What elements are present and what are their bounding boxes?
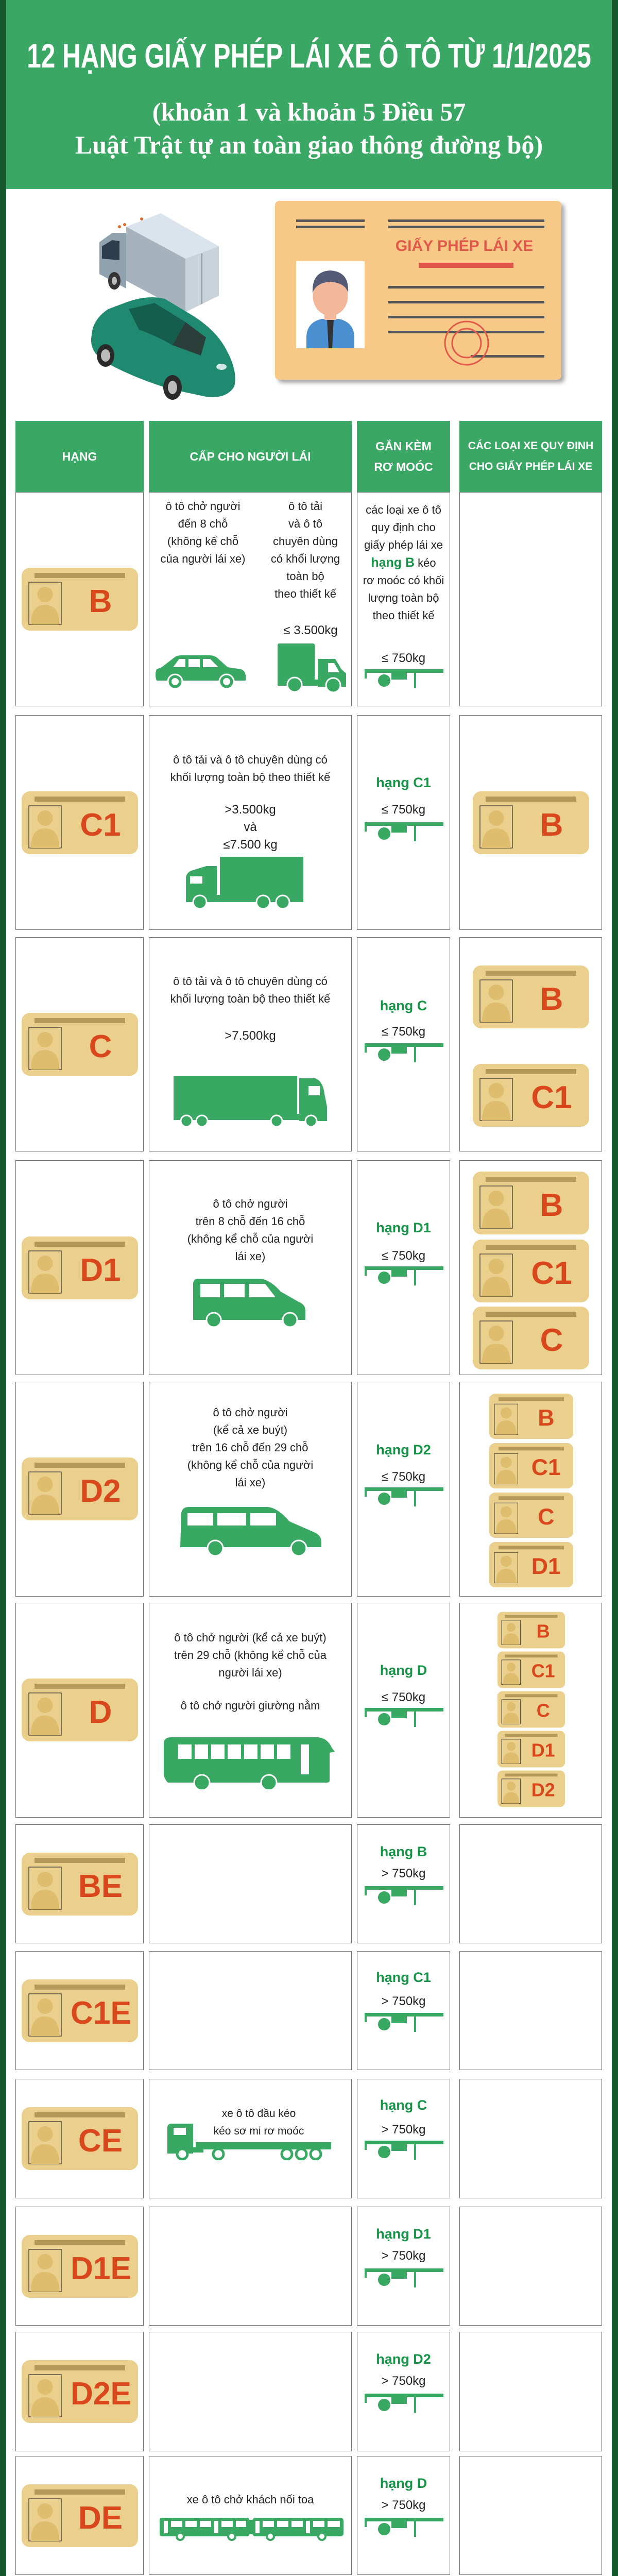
included licences B, C1, C, D1, D2: C1 (531, 1660, 555, 1681)
included licence B: B (540, 807, 563, 843)
text: hạng C1: hạng C1 (376, 775, 431, 790)
licence badge D1E: D1E (71, 2251, 131, 2286)
licence badge C1 (22, 791, 138, 854)
header: HẠNG: HẠNG (62, 450, 97, 463)
icon: trailer (365, 822, 443, 841)
row: hạng DE (0, 2456, 618, 2575)
text: trailer rule B (363, 503, 444, 622)
icon: box truck (278, 643, 346, 691)
photo (296, 261, 365, 348)
text: trailer rule B: lượng toàn bộ (368, 591, 439, 604)
text: C1 weights (223, 803, 278, 852)
text: hạng D1: hạng D1 (376, 2226, 431, 2242)
licence badge C (22, 1013, 138, 1076)
text: C weight: >7.500kg (225, 1029, 276, 1043)
licence badge D: D (89, 1694, 112, 1730)
icon: trailer (365, 1706, 443, 1727)
included licences B, C1, C, D1, D2 (497, 1612, 565, 1807)
text: trailer rule B: quy định cho (371, 521, 436, 534)
text: hạng D: hạng D (380, 2476, 427, 2491)
icon: heavy truck (174, 1076, 327, 1126)
illustration: driving licence card (275, 201, 561, 380)
text: ≤ 750kg: ≤ 750kg (382, 1025, 425, 1039)
text: hạng D2: hạng D2 (376, 1442, 431, 1458)
row: hạng D2E (0, 2332, 618, 2451)
subtitle: Luật Trật tự an toàn giao thông đường bộ) (75, 130, 543, 159)
licence badge C1: C1 (80, 807, 121, 843)
text: sleeper bus: ô tô chở người giường nằm (181, 1699, 320, 1712)
icon: trailer (365, 1487, 443, 1506)
text: hạng D2: hạng D2 (376, 2351, 431, 2367)
text: C1 weights: và (244, 820, 257, 834)
included licences B, C1, C, D1, D2: C (537, 1700, 550, 1721)
licence badge D2: D2 (80, 1473, 121, 1509)
text: passenger car (161, 500, 245, 565)
text: articulated bus: xe ô tô chở khách nối toa (187, 2493, 314, 2506)
text: trailer rule B: theo thiết kế (373, 609, 434, 622)
text: tractor description: xe ô tô đầu kéo (222, 2108, 296, 2120)
header: CẤP CHO NGƯỜI LÁI: CẤP CHO NGƯỜI LÁI (190, 450, 311, 463)
header: GẮN KÈM RƠ MOÓC (357, 421, 450, 492)
text: C description: khối lượng toàn bộ theo thiết kế (170, 992, 330, 1005)
text: light truck (271, 500, 340, 600)
text: light truck: theo thiết kế (274, 587, 336, 600)
licence badge B (22, 568, 138, 631)
illustration: truck and car (91, 213, 235, 400)
licence badge BE (22, 1853, 138, 1916)
row: hạng D1E (0, 2207, 618, 2326)
text: > 750kg: > 750kg (381, 2123, 426, 2137)
row: hạng BE (0, 1824, 618, 1943)
row: hạng C (15, 937, 602, 1151)
included licences B, C1, C, D1 (489, 1394, 573, 1587)
icon: trailer (365, 1884, 443, 1906)
text: D description (149, 1629, 352, 1682)
text: D description: ô tô chở người (kể cả xe buýt) (174, 1631, 327, 1644)
text: D2 description: trên 16 chỗ đến 29 chỗ (192, 1441, 308, 1454)
text: tractor description: kéo sơ mi rơ moóc (214, 2125, 304, 2137)
header: CÁC LOẠI XE (459, 421, 602, 492)
card title: GIẤY PHÉP LÁI XE (396, 238, 533, 255)
icon: trailer (365, 2139, 443, 2160)
icon: large van (180, 1507, 321, 1555)
text: D2 description: ô tô chở người (213, 1406, 288, 1419)
icon: trailer (365, 2011, 443, 2032)
licence badge C1E: C1E (71, 1995, 131, 2031)
icon: trailer (365, 2392, 443, 2413)
text: hạng C: hạng C (380, 998, 427, 1013)
included licences B, C1 (473, 965, 589, 1127)
text: passenger car: ô tô chở người (165, 500, 241, 513)
icon: trailer (365, 1043, 443, 1062)
text: hạng C1: hạng C1 (376, 1970, 431, 1985)
text: D2 description: lái xe) (235, 1476, 265, 1489)
text: light truck: và ô tô (288, 517, 322, 530)
text: C1 weights: >3.500kg (225, 803, 276, 817)
header: GẮN KÈM RƠ MOÓC: GẮN KÈM (375, 439, 432, 453)
text: D1 description: trên 8 chỗ đến 16 chỗ (196, 1215, 305, 1228)
header: CÁC LOẠI XE: CÁC LOẠI XE QUY ĐỊNH (468, 440, 593, 452)
text: D1 description: lái xe) (235, 1250, 265, 1263)
row: hạng D2 (15, 1382, 602, 1597)
subtitle (75, 97, 543, 159)
text: C1 description (170, 753, 330, 784)
text: ≤ 750kg: ≤ 750kg (382, 1249, 425, 1263)
included licences B, C1: C1 (531, 1080, 572, 1115)
text: trailer rule B: các loại xe ô tô (366, 503, 441, 516)
row: hạng C1 (15, 715, 602, 930)
icon: rigid truck (186, 857, 303, 908)
title: 12 HẠNG GIẤY PHÉP LÁI XE Ô TÔ TỪ 1/1/2025 (27, 37, 591, 75)
text: D2 description: (không kể chỗ của người (187, 1459, 313, 1471)
text: > 750kg: > 750kg (381, 1994, 426, 2008)
subtitle: (khoản 1 và khoản 5 Điều 57 (152, 97, 466, 126)
icon: car (156, 655, 246, 688)
text: C1 description: ô tô tải và ô tô chuyên dùng có (173, 753, 328, 766)
text: passenger car: (không kể chỗ (167, 535, 238, 548)
included licence B (473, 791, 589, 854)
icon: trailer (365, 669, 443, 688)
licence badge D2E (22, 2360, 138, 2423)
text: ≤ 750kg: ≤ 750kg (382, 651, 425, 665)
text: C1 description: khối lượng toàn bộ theo thiết kế (170, 771, 330, 784)
text: light truck: có khối lượng (271, 552, 340, 565)
icon: trailer (365, 1266, 443, 1285)
row: hạng CE (0, 2079, 618, 2198)
text: hạng B: hạng B (380, 1844, 427, 1859)
licence badge D1 (22, 1236, 138, 1299)
included licences B, C1, C: C (540, 1323, 563, 1358)
licence badge BE: BE (78, 1869, 123, 1904)
included licences B, C1, C, D1, D2: D1 (531, 1739, 555, 1760)
text: > 750kg: > 750kg (381, 2498, 426, 2512)
text: D1 description: ô tô chở người (213, 1197, 288, 1210)
included licences B, C1, C (473, 1172, 589, 1369)
header: GẮN KÈM RƠ MOÓC: RƠ MOÓC (374, 460, 433, 473)
icon: bus (164, 1737, 335, 1789)
text: hạng D1: hạng D1 (376, 1220, 431, 1235)
text: > 750kg: > 750kg (381, 1867, 426, 1880)
text: ≤ 750kg: ≤ 750kg (382, 803, 425, 817)
text: light truck: chuyên dùng (273, 535, 338, 548)
text: weight: ≤ 3.500kg (283, 623, 338, 637)
icon: trailer (365, 2266, 443, 2288)
header: HẠNG (15, 421, 144, 492)
licence badge D (22, 1679, 138, 1741)
text: > 750kg: > 750kg (381, 2249, 426, 2263)
included licences B, C1, C, D1: D1 (531, 1554, 561, 1579)
text: C description: ô tô tải và ô tô chuyên dùng có (173, 975, 328, 988)
icon: trailer (365, 2516, 443, 2537)
text: light truck: toàn bộ (286, 570, 324, 583)
icon: tractor with semi-trailer (167, 2122, 331, 2160)
text: D description: trên 29 chỗ (không kể chỗ của (174, 1649, 327, 1662)
icon: articulated bus (160, 2517, 344, 2541)
included licences B, C1, C, D1, D2: B (537, 1620, 550, 1641)
licence badge CE: CE (78, 2123, 123, 2159)
text: C description (170, 975, 330, 1005)
licence badge D1E (22, 2235, 138, 2298)
licence badge D1: D1 (80, 1252, 121, 1288)
text: passenger car: đến 8 chỗ (178, 517, 228, 530)
table header (15, 421, 602, 492)
header: CÁC LOẠI XE: CHO GIẤY PHÉP LÁI XE (469, 461, 592, 472)
licence badge CE (22, 2107, 138, 2170)
included licences B, C1, C, D1: C1 (531, 1455, 561, 1480)
text: D2 description (187, 1406, 313, 1489)
text: ≤ 750kg: ≤ 750kg (382, 1470, 425, 1484)
licence badge DE: DE (78, 2500, 123, 2536)
stamp (444, 320, 489, 366)
licence badge D2 (22, 1458, 138, 1520)
text: trailer rule B: hạng B kéo (371, 555, 436, 570)
text: > 750kg: > 750kg (381, 2374, 426, 2388)
included licences B, C1, C: C1 (531, 1256, 572, 1291)
row: hạng C1E (0, 1951, 618, 2070)
text: D description: người lái xe) (218, 1666, 282, 1679)
licence badge B: B (89, 584, 112, 619)
text: D2 description: (kể cả xe buýt) (213, 1423, 287, 1436)
header: CẤP CHO NGƯỜI LÁI (149, 421, 352, 492)
licence badge D2E: D2E (71, 2376, 131, 2412)
text: passenger car: của người lái xe) (161, 552, 245, 565)
included licences B, C1, C, D1, D2: D2 (531, 1779, 555, 1800)
text: D1 description: (không kể chỗ của người (187, 1232, 313, 1245)
licence badge DE (22, 2484, 138, 2547)
included licences B, C1: B (540, 981, 563, 1017)
text: light truck: ô tô tải (288, 500, 322, 513)
text: hạng D: hạng D (380, 1663, 427, 1678)
included licences B, C1, C, D1: C (538, 1504, 555, 1530)
licence badge C: C (89, 1029, 112, 1064)
header band (6, 0, 612, 189)
text: C1 weights: ≤7.500 kg (223, 838, 278, 852)
included licences B, C1, C, D1: B (538, 1405, 555, 1431)
row: hạng D1 (15, 1160, 602, 1375)
text: trailer rule B: rơ moóc có khối (363, 574, 444, 587)
included licences B, C1, C: B (540, 1188, 563, 1223)
text: D1 description (187, 1197, 313, 1263)
text: tractor description (201, 2105, 317, 2140)
row: hạng B (15, 492, 602, 706)
text: ≤ 750kg: ≤ 750kg (382, 1690, 425, 1704)
text: trailer rule B: giấy phép lái xe (364, 538, 443, 551)
icon: minivan (193, 1279, 305, 1326)
row: hạng D (15, 1603, 602, 1818)
licence badge C1E (22, 1979, 138, 2042)
text: hạng C: hạng C (380, 2097, 427, 2113)
